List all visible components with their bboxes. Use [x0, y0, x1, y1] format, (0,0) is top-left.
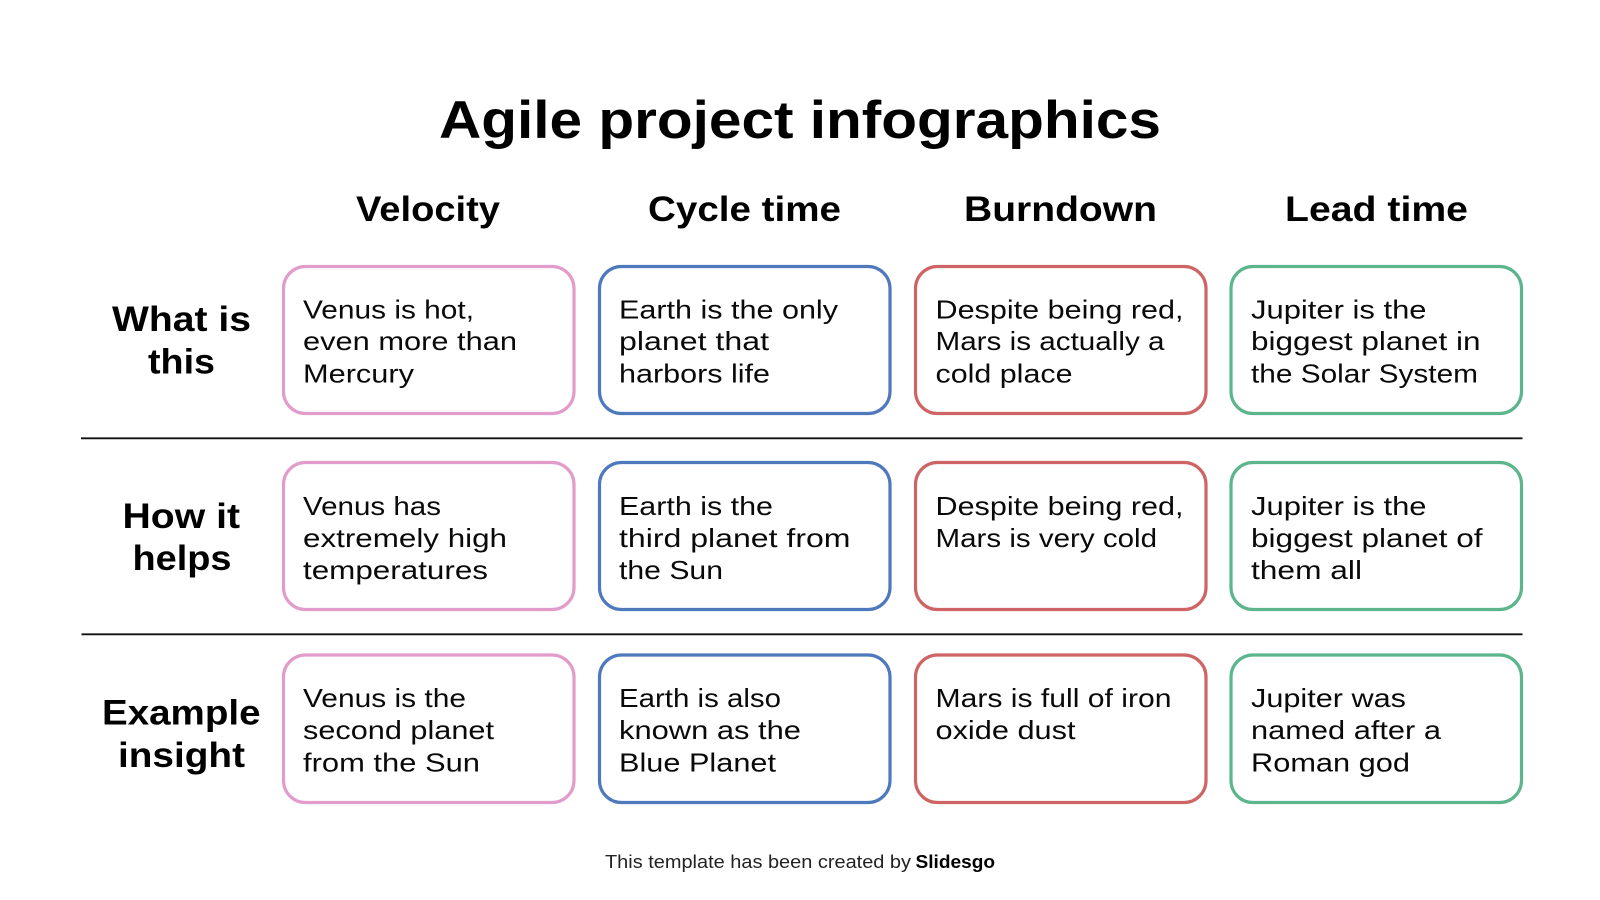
card: Burndown / What is this: cold place	[936, 358, 1072, 388]
card: Velocity / What is this: Venus is hot,	[303, 294, 474, 324]
row label: Example insight: Example	[102, 694, 260, 732]
row label: How it helps: How it	[122, 497, 240, 536]
heading: Cycle time: Cycle time	[648, 190, 841, 229]
card: Burndown / How it helps	[916, 462, 1206, 610]
card: Velocity / Example insight: from the Sun	[303, 748, 480, 778]
card: Burndown / What is this: Mars is actually a	[936, 326, 1165, 356]
card: Burndown / Example insight: oxide dust	[936, 715, 1076, 745]
footer credit: Slidesgo	[916, 852, 995, 872]
card: Velocity / What is this: Mercury	[303, 358, 414, 388]
row label: How it helps	[122, 497, 240, 578]
row label: What is this: this	[148, 342, 215, 382]
row label: Example insight	[102, 694, 260, 775]
card: Burndown / Example insight: Mars is full of iron	[936, 683, 1172, 713]
card: Velocity / How it helps: Venus has	[303, 491, 441, 521]
heading: Velocity: Velocity	[356, 190, 501, 229]
card: Cycle time / What is this: planet that	[619, 326, 770, 356]
card: Burndown / What is this	[916, 266, 1206, 414]
row label: How it helps: helps	[132, 539, 232, 578]
card: Cycle time / How it helps: the Sun	[619, 555, 723, 585]
card: Velocity / What is this	[284, 266, 574, 414]
row label: Example insight: insight	[118, 736, 245, 775]
card: Lead time / Example insight	[1231, 655, 1522, 802]
heading: Burndown: Burndown	[964, 190, 1157, 229]
card: Cycle time / Example insight: known as the	[619, 715, 801, 745]
card: Burndown / What is this: Despite being red,	[936, 294, 1184, 324]
card: Lead time / How it helps: biggest planet of	[1251, 523, 1483, 553]
card: Lead time / What is this: the Solar System	[1251, 358, 1478, 388]
card: Cycle time / Example insight: Blue Planet	[619, 748, 777, 778]
card: Cycle time / How it helps: third planet from	[619, 523, 850, 553]
card: Cycle time / What is this	[600, 266, 890, 414]
row label: What is this	[112, 300, 251, 382]
card: Burndown / How it helps: Despite being red,	[936, 491, 1184, 521]
card: Lead time / How it helps: Jupiter is the	[1251, 491, 1426, 521]
column headings	[356, 190, 1468, 229]
card: Cycle time / What is this: harbors life	[619, 358, 770, 388]
heading: Lead time: Lead time	[1285, 190, 1468, 229]
title: Agile project infographics	[439, 91, 1161, 150]
card: Lead time / Example insight: named after a	[1251, 715, 1442, 745]
card: Lead time / What is this: biggest planet in	[1251, 326, 1480, 356]
card: Cycle time / Example insight: Earth is also	[619, 683, 781, 713]
card: Cycle time / How it helps	[600, 462, 890, 610]
card: Lead time / Example insight: Jupiter was	[1251, 683, 1406, 713]
footer credit: This template has been created by	[605, 852, 911, 872]
row label: What is this: What is	[112, 300, 251, 339]
card: Lead time / How it helps: them all	[1251, 555, 1362, 585]
card: Lead time / What is this: Jupiter is the	[1251, 294, 1426, 324]
card: Cycle time / Example insight	[600, 655, 890, 802]
card: Lead time / How it helps	[1231, 462, 1522, 610]
card: Velocity / Example insight: second planet	[303, 715, 495, 745]
card: Velocity / What is this: even more than	[303, 326, 517, 356]
card: Burndown / How it helps: Mars is very cold	[936, 523, 1157, 553]
card: Burndown / Example insight	[916, 655, 1206, 802]
card: Lead time / Example insight: Roman god	[1251, 748, 1410, 778]
card: Velocity / How it helps: temperatures	[303, 555, 488, 585]
card: Velocity / How it helps	[284, 462, 574, 610]
card: Velocity / Example insight: Venus is the	[303, 683, 466, 713]
card: Cycle time / How it helps: Earth is the	[619, 491, 773, 521]
card: Lead time / What is this	[1231, 266, 1522, 414]
card: Cycle time / What is this: Earth is the only	[619, 294, 838, 324]
card: Velocity / Example insight	[284, 655, 574, 802]
card: Velocity / How it helps: extremely high	[303, 523, 507, 553]
